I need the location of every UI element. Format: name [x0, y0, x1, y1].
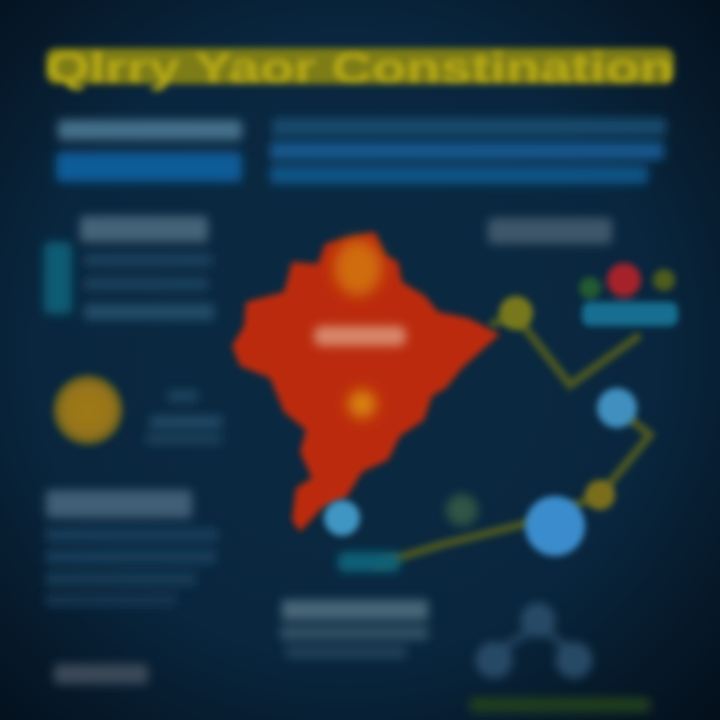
icon: teal bar: [44, 242, 72, 314]
map: red country: [232, 232, 500, 532]
title: Qlrry Yaor Constination: [46, 44, 674, 91]
footer logo text: [54, 664, 148, 684]
map label: [314, 326, 406, 346]
header panel: left summary: [56, 120, 242, 182]
route node: blue large: [525, 496, 585, 556]
text block: bottom centre: [280, 600, 428, 658]
route: olive path: [375, 315, 650, 565]
heading: upper right: [488, 218, 612, 244]
icon: gold circle: [53, 375, 123, 445]
map marker: orange spot: [348, 390, 376, 418]
route node: blue upper: [597, 388, 637, 428]
route node: blue at map tip: [324, 500, 360, 536]
text block: upper left: [80, 216, 214, 320]
teal label: [338, 552, 400, 572]
route node: olive: [585, 480, 615, 510]
text block: lower left: [46, 490, 218, 606]
route node: yellow: [499, 296, 533, 330]
route node: small olive: [446, 494, 478, 526]
icon: red and green cluster: [579, 263, 678, 326]
icon: network tree: [479, 606, 589, 675]
header panel: right summary: [270, 118, 666, 184]
footer: olive strip: [470, 698, 650, 712]
map highlight: orange top: [334, 240, 382, 296]
text block: beside gold circle: [146, 390, 222, 444]
